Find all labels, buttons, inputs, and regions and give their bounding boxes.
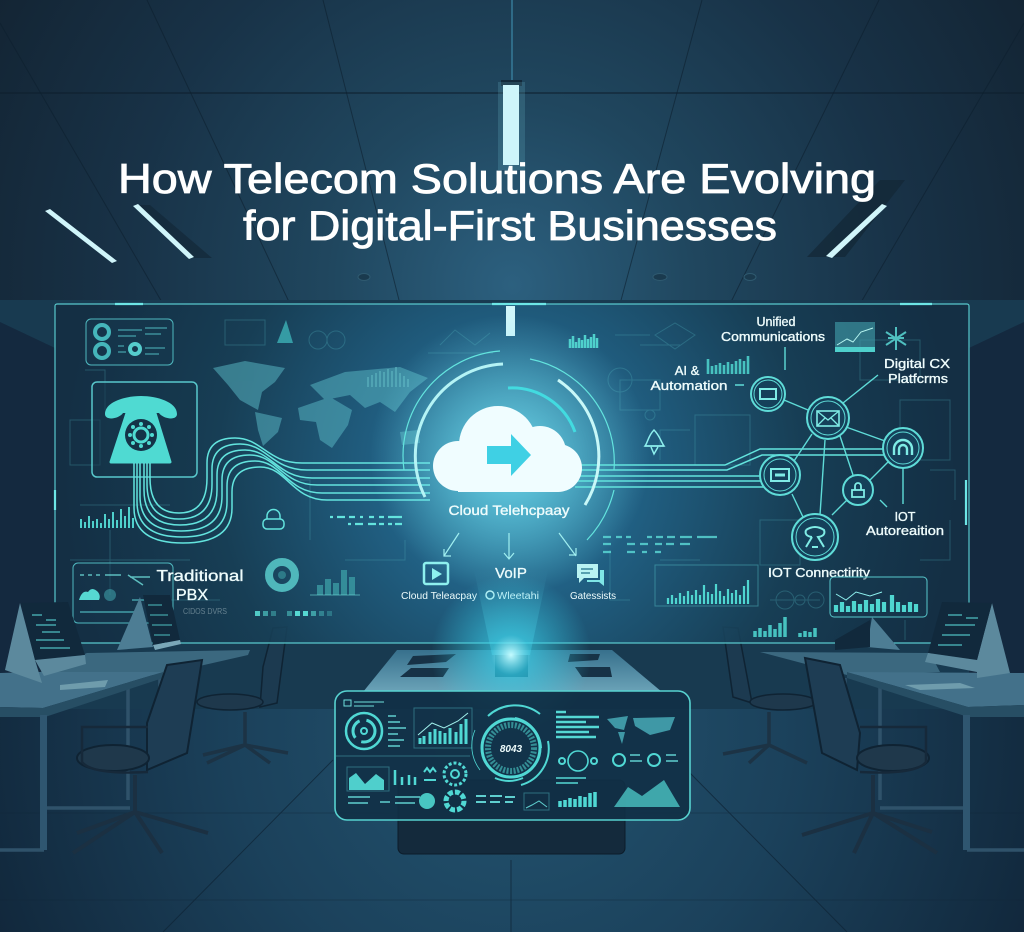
label: Unified Communications: Unified <box>757 315 795 329</box>
label: Wleetahi: Wleetahi <box>497 591 539 602</box>
panel: top-left status card <box>86 319 173 365</box>
label: IOT Autoreaition: Autoreaition <box>866 524 944 538</box>
icon: rotary telephone <box>92 382 197 477</box>
node: IoT robot <box>792 514 838 560</box>
label: Digital CX Platforms <box>884 357 951 386</box>
chairs left <box>197 627 288 763</box>
front chair right <box>802 658 937 853</box>
light beam from table projector <box>431 570 591 735</box>
label: AI and Automation: Automation <box>650 378 728 393</box>
node: envelope <box>807 397 849 439</box>
center conference table <box>363 650 662 854</box>
chart: map overlay bars <box>368 367 408 387</box>
left desk legs <box>0 678 160 850</box>
node: lock <box>843 475 873 505</box>
label: VoIP: VoIP <box>495 565 527 582</box>
label: AI and Automation: AI & <box>675 363 700 378</box>
bar chart: near AI and Automation <box>708 356 748 374</box>
label: Traditional PBX: PBX <box>176 587 208 604</box>
gauge: central ring: 8043 <box>500 744 523 755</box>
center glow <box>370 315 650 595</box>
node: arch <box>883 428 923 468</box>
small icons: coils <box>559 751 597 771</box>
label: Traditional PBX <box>156 568 244 604</box>
icon: cloud with arrow <box>433 406 582 492</box>
small legends <box>476 796 515 802</box>
label: Traditional PBX: Traditional <box>156 568 244 585</box>
title <box>118 155 876 249</box>
icon: play box <box>424 563 448 584</box>
node network lines <box>735 347 903 517</box>
background: side walls <box>0 322 1024 712</box>
ceiling lights <box>45 80 905 263</box>
node: laptop <box>751 377 785 411</box>
chart: area right <box>614 780 680 807</box>
gauge: left ring <box>346 713 382 749</box>
icon: chat bubbles <box>577 564 604 586</box>
chart: area lines <box>347 767 389 791</box>
background: floor <box>0 709 1024 932</box>
panel: lower-right mini chart <box>830 577 927 617</box>
status circles <box>613 754 660 766</box>
icon: faint cone <box>277 320 293 343</box>
icon: globe small <box>486 591 494 599</box>
world map mini <box>607 716 675 744</box>
label: IOT Connectivity: IOT Connectirity <box>768 565 871 580</box>
title: for Digital-First Businesses <box>243 202 777 249</box>
icon: ceiling smoke detectors <box>358 274 756 280</box>
label: Unified Communications: Communications <box>721 330 825 344</box>
label: IOT Autoreaition <box>866 510 944 538</box>
data strip: squares <box>255 611 332 616</box>
panel: holographic wall display <box>55 304 969 643</box>
world map <box>213 361 428 448</box>
connection lines: phone to cloud <box>134 438 430 543</box>
left workstation: desks and monitors <box>0 595 250 850</box>
icon: bell rocket <box>645 430 664 454</box>
panel: lower-left dashboard card <box>73 563 173 623</box>
label: Unified Communications <box>721 315 825 344</box>
gauge: central ring <box>472 705 549 785</box>
label: IOT Autoreaition: IOT <box>895 510 916 524</box>
dot: solid gauge <box>419 793 435 809</box>
faint label: CIDOS DVRS <box>183 607 227 616</box>
right workstation: desks and monitors <box>760 602 1024 850</box>
front chair left <box>73 660 208 853</box>
label: Gatessists: Gatessists <box>570 591 616 602</box>
bar chart: top center-right <box>570 334 597 348</box>
background: back wall <box>0 300 1024 712</box>
label: Digital CX Platforms: Digital CX <box>884 357 951 371</box>
icon: padlock outline <box>263 510 284 529</box>
data strip: dashes left <box>330 517 402 524</box>
right desk legs <box>845 678 1024 850</box>
panel: table dashboard <box>335 691 690 820</box>
title: How Telecom Solutions Are Evolving <box>118 155 876 202</box>
decorative background details <box>70 320 955 640</box>
mini bars and dials <box>395 763 466 810</box>
chart: top bars <box>414 708 472 748</box>
icon: snowflake network <box>886 327 906 350</box>
bar chart: bottom of panel <box>755 617 815 637</box>
chart: bars mid right <box>556 778 595 807</box>
label: Cloud Telehepaay: Cloud Telehcpaay <box>448 502 570 518</box>
chairs right <box>723 627 816 763</box>
bar chart: lower right <box>655 565 758 606</box>
background: ceiling <box>0 0 1024 330</box>
label: AI and Automation <box>650 363 728 393</box>
node: phone <box>760 455 800 495</box>
label: Cloud Teleacpay: Cloud Teleacpay <box>401 590 478 602</box>
arcs around cloud <box>403 351 614 540</box>
data strip: dashes right <box>603 537 717 552</box>
connection lines: cloud to nodes <box>575 449 885 487</box>
bar chart: left <box>81 507 133 528</box>
label: Digital CX Platforms: Platfcrms <box>888 372 948 386</box>
bar chart: lower middle <box>310 570 360 595</box>
arrows from cloud <box>444 533 576 559</box>
icon: donut chart <box>269 562 295 588</box>
chart card: top right <box>835 322 875 352</box>
list bars <box>556 712 599 737</box>
